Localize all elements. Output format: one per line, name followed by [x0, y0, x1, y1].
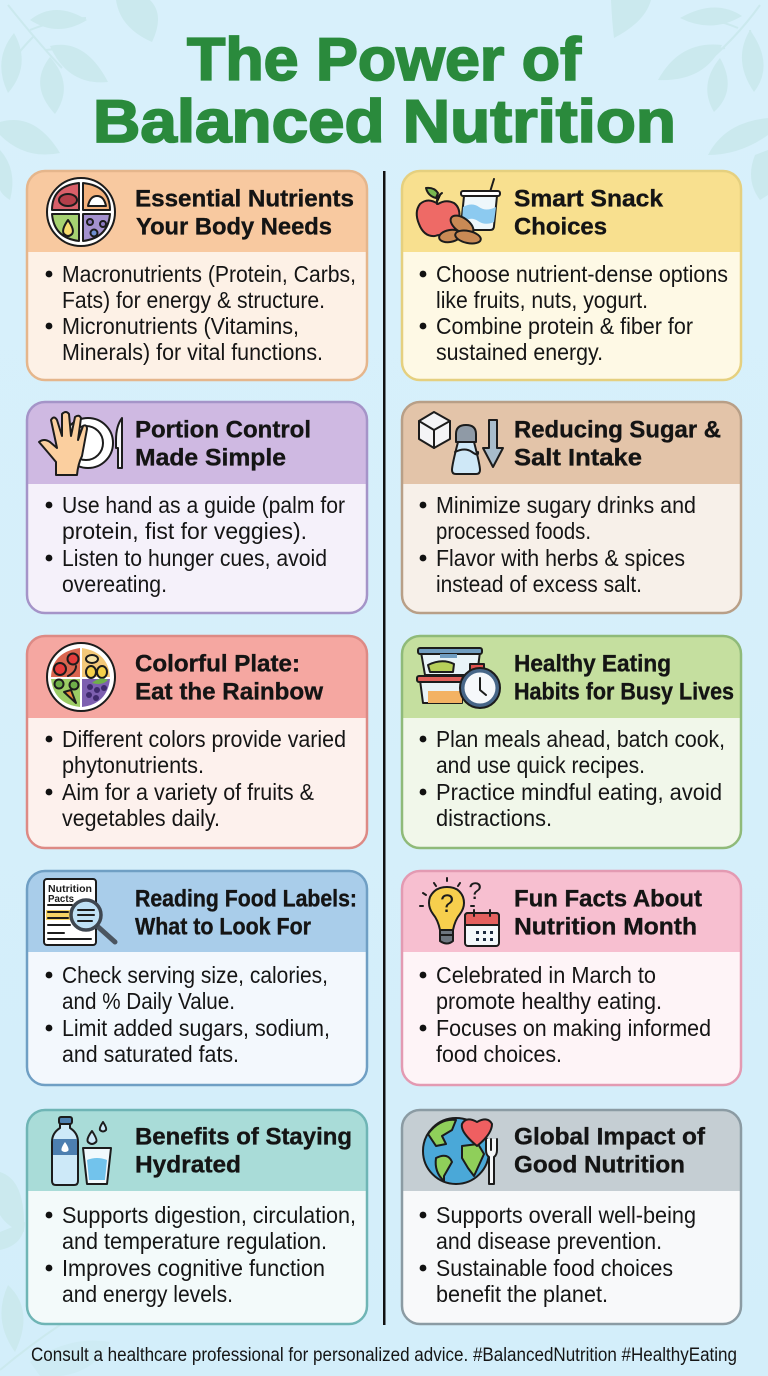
title: Balanced Nutrition	[93, 88, 676, 155]
heading: Salt Intake	[514, 444, 642, 472]
bullet list	[46, 492, 345, 597]
panel: fun facts	[402, 871, 741, 1085]
title: The Power of	[187, 26, 582, 93]
bullet list: Improves cognitive function	[62, 1255, 325, 1281]
center divider line	[383, 171, 386, 1325]
background leaves: bottom left	[0, 1172, 110, 1376]
bullet list: Supports overall well-being	[436, 1202, 696, 1228]
heading: Choices	[514, 214, 607, 240]
bullet list	[46, 962, 330, 1067]
icon: light bulb and calendar: ?	[468, 878, 482, 905]
icon: divided nutrient plate	[47, 178, 115, 246]
bullet list	[46, 726, 346, 831]
bullet list: phytonutrients.	[62, 752, 204, 778]
bullet list: Listen to hunger cues, avoid	[62, 545, 327, 571]
bullet list: Celebrated in March to	[436, 962, 656, 988]
heading: Global Impact of	[514, 1124, 706, 1150]
bullet list: overeating.	[62, 571, 167, 597]
icon: globe, heart and fork	[423, 1118, 497, 1184]
title	[93, 26, 676, 155]
bullet list	[420, 1202, 696, 1307]
bullet list: Use hand as a guide (palm for	[62, 492, 345, 518]
heading: Good Nutrition	[514, 1152, 685, 1178]
bullet list: Combine protein & fiber for	[436, 313, 693, 339]
bullet list: like fruits, nuts, yogurt.	[436, 287, 648, 313]
bullet list: protein, fist for veggies).	[62, 518, 307, 544]
heading: Fun Facts About	[514, 886, 702, 912]
heading	[514, 650, 734, 706]
bullet list	[420, 962, 711, 1067]
panel: global impact	[402, 1110, 741, 1324]
panel: smart snack choices	[402, 171, 741, 380]
icon: water bottle, drops and glass	[52, 1117, 111, 1185]
heading: Reading Food Labels:	[135, 886, 357, 912]
bullet list: food choices.	[436, 1041, 562, 1067]
heading: Portion Control	[135, 416, 311, 444]
bullet list: Supports digestion, circulation,	[62, 1202, 356, 1228]
bullet list: Choose nutrient-dense options	[436, 261, 728, 287]
heading: Hydrated	[135, 1152, 241, 1178]
heading: Reducing Sugar &	[514, 416, 721, 444]
heading	[135, 886, 357, 940]
bullet list: Fats) for energy & structure.	[62, 287, 325, 313]
bullet list: sustained energy.	[436, 339, 603, 365]
icon: rainbow plate	[47, 643, 115, 711]
bullet list: Check serving size, calories,	[62, 962, 328, 988]
panel: benefits of staying hydrated	[27, 1110, 367, 1324]
icon: light bulb and calendar	[420, 878, 499, 946]
heading: Your Body Needs	[136, 214, 332, 240]
bullet list: and % Daily Value.	[62, 988, 235, 1014]
bullet list: benefit the planet.	[436, 1281, 608, 1307]
icon: nutrition label and magnifier: Pacts	[48, 893, 74, 905]
heading: Habits for Busy Lives	[514, 678, 734, 706]
icon: apple, yogurt and almonds	[417, 179, 500, 246]
bullet list: and use quick recipes.	[436, 752, 645, 778]
heading: Essential Nutrients	[135, 186, 354, 212]
bullet list: and energy levels.	[62, 1281, 233, 1307]
bullet list: processed foods.	[436, 518, 591, 544]
heading: Benefits of Staying	[135, 1124, 352, 1150]
heading: Nutrition Month	[514, 914, 697, 940]
bullet list: and temperature regulation.	[62, 1228, 327, 1254]
icon: nutrition label and magnifier: Nutrition	[48, 883, 92, 895]
bullet list: distractions.	[436, 805, 552, 831]
bullet list: Sustainable food choices	[436, 1255, 673, 1281]
heading	[135, 1124, 352, 1178]
bullet list: Minimize sugary drinks and	[436, 492, 696, 518]
heading: Made Simple	[135, 444, 286, 472]
bullet list: Practice mindful eating, avoid	[436, 779, 722, 805]
icon: sugar cube, salt shaker and down arrow	[419, 412, 503, 474]
panel: healthy eating habits	[402, 636, 741, 848]
bullet list: instead of excess salt.	[436, 571, 642, 597]
bullet list: Micronutrients (Vitamins,	[62, 313, 299, 339]
bullet list: promote healthy eating.	[436, 988, 662, 1014]
bullet list: Macronutrients (Protein, Carbs,	[62, 261, 356, 287]
panel: reading food labels	[27, 871, 367, 1085]
bullet list	[46, 1202, 356, 1307]
heading	[514, 886, 702, 940]
bullet list: Minerals) for vital functions.	[62, 339, 323, 365]
bullet list	[420, 492, 696, 597]
heading: Healthy Eating	[514, 650, 671, 678]
heading: Colorful Plate:	[135, 650, 300, 678]
icon: meal prep boxes and clock	[417, 648, 500, 708]
heading	[514, 1124, 706, 1178]
heading: What to Look For	[135, 914, 311, 940]
panel: colorful plate	[27, 636, 367, 848]
heading	[514, 186, 664, 240]
bullet list	[46, 261, 356, 365]
bullet list	[420, 261, 728, 365]
bullet list: vegetables daily.	[62, 805, 220, 831]
icon: nutrition label and magnifier	[44, 879, 115, 945]
panel: reducing sugar and salt	[402, 402, 741, 613]
bullet list: Aim for a variety of fruits &	[62, 779, 314, 805]
bullet list: and saturated fats.	[62, 1041, 239, 1067]
heading: Smart Snack	[514, 186, 664, 212]
bullet list: Flavor with herbs & spices	[436, 545, 685, 571]
panel: essential nutrients	[27, 171, 367, 380]
bullet list	[420, 726, 725, 831]
heading	[135, 416, 311, 472]
icon: light bulb and calendar: ?	[440, 890, 454, 918]
heading	[135, 186, 354, 240]
bullet list: Different colors provide varied	[62, 726, 346, 752]
background leaves: top left	[0, 0, 158, 200]
icon: hand, plate and knife	[39, 412, 122, 475]
bullet list: and disease prevention.	[436, 1228, 662, 1254]
panel: portion control	[27, 402, 367, 613]
heading	[514, 416, 721, 472]
heading	[135, 650, 323, 706]
bullet list: Focuses on making informed	[436, 1015, 711, 1041]
heading: Eat the Rainbow	[135, 678, 323, 706]
bullet list: Plan meals ahead, batch cook,	[436, 726, 725, 752]
bullet list: Limit added sugars, sodium,	[62, 1015, 330, 1041]
background leaves: top right	[611, 0, 768, 200]
